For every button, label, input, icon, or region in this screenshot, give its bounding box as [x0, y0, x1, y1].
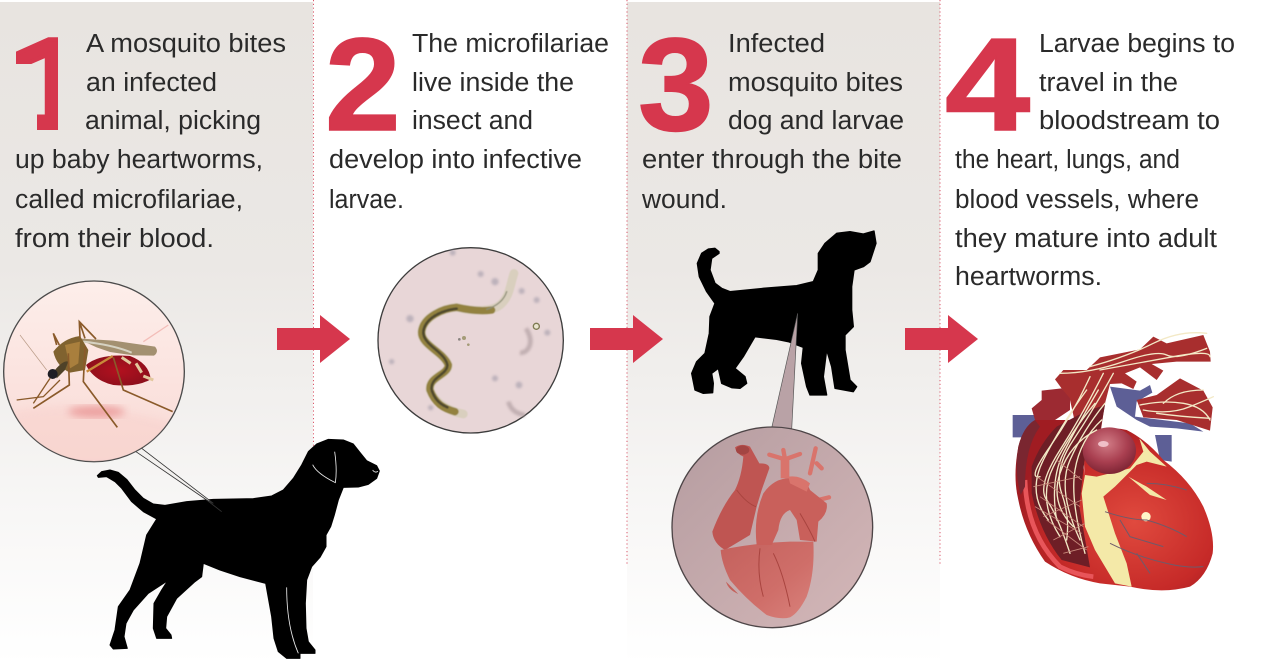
step 1 text: an infected — [86, 69, 217, 97]
callout pointer — [136, 448, 213, 503]
number 1: 1 — [3, 10, 109, 158]
number 2: 2 — [325, 12, 401, 159]
icon: curly dog silhouette with heart callout — [672, 231, 876, 628]
step 1 text: from their blood. — [15, 225, 214, 253]
panel: step 3 background — [627, 2, 940, 664]
heartworms — [1035, 333, 1213, 553]
yellow fat — [1082, 438, 1167, 587]
step 1 text: up baby heartworms, — [15, 146, 263, 174]
number 3: 3 — [638, 12, 714, 159]
step 2 text: larvae. — [329, 186, 404, 214]
step 4 text: the heart, lungs, and — [955, 146, 1180, 174]
step 4 text: bloodstream to — [1039, 107, 1220, 135]
step 2 text: The microfilariae — [412, 30, 609, 58]
arrow 3 — [905, 315, 978, 363]
aortic lump — [1083, 427, 1136, 474]
step 3 text — [641, 30, 904, 214]
coronary vessels — [1105, 483, 1203, 573]
arrow 1 — [277, 315, 350, 363]
step 2 text — [329, 30, 609, 214]
step 4 text: they mature into adult — [955, 225, 1217, 253]
step 3 text: Infected — [728, 30, 825, 58]
step 3 text: mosquito bites — [728, 69, 903, 97]
panel: step 1 background — [0, 2, 313, 664]
step 3 text: dog and larvae — [728, 107, 904, 135]
photo: microfilaria under microscope — [378, 248, 563, 433]
photo: anatomical heart — [672, 427, 873, 628]
step 1 text: called microfilariae, — [15, 186, 243, 214]
step 2 text: live inside the — [412, 69, 574, 97]
callout pointer — [772, 313, 798, 430]
step 4 text: heartworms. — [955, 263, 1102, 291]
step 4 text: travel in the — [1039, 69, 1178, 97]
step 1 text: A mosquito bites — [86, 30, 286, 58]
step 4 text — [955, 30, 1235, 291]
heart body — [1015, 420, 1213, 590]
step 2 text: insect and — [412, 107, 533, 135]
step 1 text — [15, 30, 286, 253]
number 4: 4 — [945, 12, 1030, 159]
blue veins — [1013, 385, 1203, 462]
step 3 text: wound. — [641, 186, 727, 214]
step 4 text: Larvae begins to — [1039, 30, 1235, 58]
step 2 text: develop into infective — [329, 146, 582, 174]
photo: mosquito — [3, 281, 184, 467]
illustration: heart infested with heartworms — [1013, 333, 1213, 590]
cut-away chamber — [1032, 405, 1105, 567]
step 3 text: enter through the bite — [642, 146, 902, 174]
arrow 2 — [590, 315, 663, 363]
step 1 text: animal, picking — [85, 107, 261, 135]
icon: labrador silhouette with mosquito callout — [3, 281, 379, 658]
step 4 text: blood vessels, where — [955, 186, 1199, 214]
pulmonary artery branches — [1055, 335, 1211, 432]
